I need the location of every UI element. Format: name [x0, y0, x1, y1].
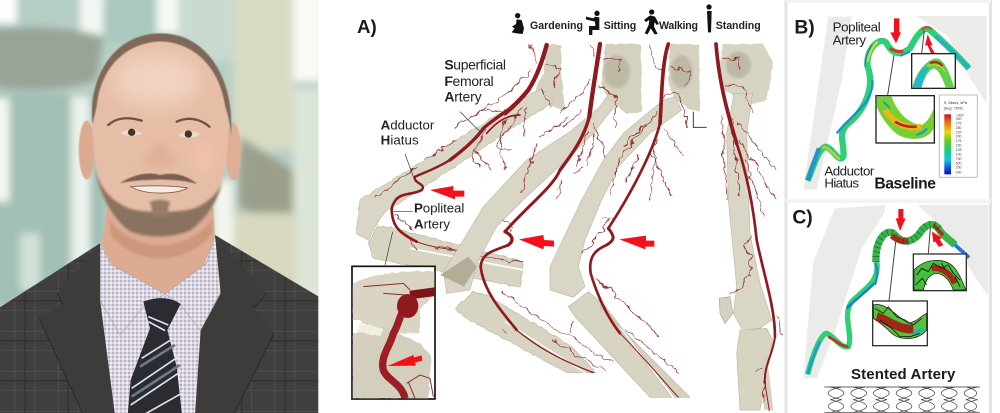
legend: 175 — [956, 139, 962, 143]
neck — [102, 207, 215, 294]
photo background: blurred atrium windows — [0, 0, 323, 413]
hair — [92, 33, 231, 135]
sitting skeleton and artery — [440, 43, 642, 373]
branches — [582, 43, 692, 373]
arrow — [430, 186, 464, 199]
sitting upper branches — [560, 43, 622, 173]
pelvis — [720, 44, 773, 104]
sitting tibia and fibula — [455, 292, 597, 373]
label: superficial femoral artery: Superficial — [444, 56, 506, 72]
sitting pelvis — [602, 44, 642, 114]
femur — [727, 93, 772, 328]
inset lower — [873, 301, 927, 346]
legend: 300 — [956, 117, 962, 121]
sitting text: Sitting — [604, 20, 636, 32]
axis triad — [693, 112, 707, 127]
label: popliteal artery: Popliteal — [833, 20, 881, 35]
necktie with stripes — [128, 298, 182, 413]
fibula — [762, 353, 773, 410]
inset upper — [912, 54, 955, 88]
inset aneurysm-like bend — [397, 294, 418, 318]
walking skeleton and artery — [550, 43, 707, 397]
artery — [716, 44, 775, 411]
standing skeleton and artery — [716, 44, 783, 411]
legend: S, Mises, kPa — [944, 101, 968, 105]
label: adductor hiatus: Adductor — [824, 164, 875, 179]
leader lines — [889, 228, 930, 301]
femur — [550, 97, 682, 297]
gardening text: Gardening — [530, 20, 583, 32]
shirt collar — [100, 236, 222, 335]
inset side branches — [363, 283, 433, 398]
head — [79, 33, 241, 237]
legend: 275 — [956, 122, 962, 126]
gap between tibia and fibula — [410, 248, 523, 270]
face — [92, 35, 228, 237]
legend: 000 — [956, 170, 962, 174]
sitting lower branches — [500, 117, 613, 373]
smile — [131, 186, 187, 193]
forehead highlight — [113, 53, 200, 107]
label: popliteal artery: Artery — [833, 33, 866, 48]
pelvis — [668, 44, 700, 112]
shirt — [100, 235, 223, 413]
sitting artery lower — [481, 170, 593, 373]
fibula — [600, 302, 690, 397]
panel C: stented artery — [792, 205, 988, 412]
branches — [377, 43, 560, 263]
legend: (Avg: 75%) — [944, 106, 963, 110]
arrows — [896, 209, 906, 231]
main artery, tapering distally — [392, 45, 547, 253]
inset artery — [383, 292, 435, 398]
legend: 100 — [956, 152, 962, 156]
inset bones — [353, 271, 435, 398]
pelvis — [530, 45, 565, 112]
portrait photo — [0, 0, 323, 413]
label: adductor hiatus — [824, 164, 875, 191]
femur and tibia background — [803, 205, 885, 378]
leader lines — [888, 31, 924, 95]
inset lower — [876, 96, 934, 143]
icon: standing figure — [706, 4, 712, 32]
arrows — [890, 18, 901, 43]
legend: 200 — [956, 135, 962, 139]
eyes — [121, 130, 201, 138]
label: popliteal artery: Popliteal — [414, 201, 464, 216]
artery stress model — [808, 225, 969, 374]
label: superficial femoral artery — [444, 56, 506, 104]
label: adductor hiatus — [381, 117, 435, 147]
translucent tibia band — [440, 257, 477, 287]
panel label C: C) — [792, 207, 813, 228]
stent schematic — [824, 387, 980, 412]
panel label B: B) — [794, 17, 815, 38]
beard stubble — [95, 167, 227, 237]
hip socket — [671, 55, 692, 88]
label: adductor hiatus: Hiatus — [824, 176, 859, 191]
panel label A: A) — [357, 16, 377, 37]
nose — [147, 145, 173, 167]
inset arrow — [388, 355, 422, 366]
standing text: Standing — [716, 20, 761, 32]
sitting femur — [443, 97, 617, 293]
soul patch — [150, 200, 170, 217]
right column frame — [786, 0, 990, 413]
legend: 250 — [956, 126, 962, 130]
suit jacket — [0, 235, 320, 413]
sitting artery upper — [560, 44, 600, 170]
ears — [79, 121, 95, 179]
hip socket — [726, 52, 751, 78]
label: baseline: Baseline — [874, 175, 936, 192]
label: superficial femoral artery: Artery — [444, 88, 482, 104]
branches — [723, 58, 783, 403]
sitting hip socket — [603, 55, 630, 88]
label: stented artery: Stented Artery — [851, 366, 956, 383]
inset: knee close-up — [352, 266, 435, 399]
legend — [939, 95, 977, 177]
label: superficial femoral artery: Femoral — [444, 73, 494, 89]
panel B: baseline stress — [794, 16, 987, 192]
inset upper — [913, 254, 966, 291]
label: adductor hiatus: Hiatus — [381, 132, 419, 147]
legend: 150 — [956, 144, 962, 148]
artery stress model — [808, 27, 969, 181]
legend: 750 — [956, 157, 962, 161]
femur — [356, 88, 553, 240]
arrow — [619, 236, 654, 249]
icon: gardening figure — [512, 13, 524, 34]
leader lines — [385, 112, 480, 265]
icon: sitting figure — [586, 11, 600, 35]
legend: 225 — [956, 130, 962, 134]
tibia — [368, 227, 523, 287]
right cheek glow — [196, 147, 211, 166]
walking text: Walking — [659, 20, 698, 32]
tibia — [737, 328, 773, 410]
posture legend — [512, 4, 761, 35]
tibia — [568, 292, 672, 397]
label: popliteal artery — [833, 20, 881, 48]
icon: walking figure — [644, 9, 659, 34]
legend: >300 — [956, 113, 964, 117]
femur and tibia background — [803, 17, 852, 189]
eyebrows — [108, 118, 209, 127]
label: popliteal artery: Artery — [414, 216, 450, 231]
arrow — [519, 235, 554, 249]
artery — [590, 44, 678, 397]
moustache — [120, 174, 197, 184]
legend: 125 — [956, 148, 962, 152]
label: adductor hiatus: Adductor — [381, 117, 435, 132]
lapels — [39, 235, 274, 413]
legend: 500 — [956, 161, 962, 165]
panel A: leg postures — [352, 4, 783, 411]
legend: 250 — [956, 166, 962, 170]
gardening skeleton and artery — [356, 43, 565, 287]
stented section — [876, 225, 955, 262]
label: popliteal artery — [414, 201, 464, 231]
patella — [719, 297, 733, 323]
